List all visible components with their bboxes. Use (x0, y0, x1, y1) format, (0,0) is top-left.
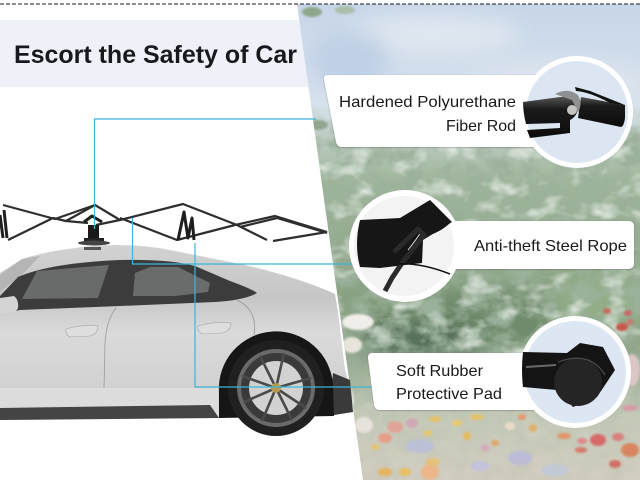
front window glass (22, 265, 109, 299)
door handles (66, 325, 98, 337)
callout: Hardened Polyurethane Fiber Rod: Hardened Polyurethane (339, 94, 516, 111)
icon: steel rope detail circle (349, 190, 461, 302)
door seams (104, 308, 116, 405)
lower highlight (0, 388, 218, 406)
rear bumper (328, 373, 353, 416)
garden photo background (290, 0, 640, 480)
folded joints (0, 210, 194, 240)
side sill (0, 405, 219, 420)
icon: rod hinge detail circle (521, 56, 633, 168)
title band (0, 20, 312, 87)
car body (0, 245, 352, 420)
icon: rubber pad detail circle (519, 316, 631, 428)
car (0, 245, 353, 436)
leader lines (94, 119, 372, 387)
wheel (228, 340, 324, 436)
rear window glass (133, 267, 210, 296)
callout: Soft Rubber Protective Pad: Soft Rubber (396, 363, 484, 380)
callout: Hardened Polyurethane Fiber Rod: Fiber Rod (446, 118, 516, 135)
title: Escort the Safety of Car (14, 41, 297, 69)
wheel arch (219, 331, 334, 418)
windshield (0, 256, 40, 292)
roof rack (0, 204, 327, 250)
side windows frame (0, 260, 257, 314)
roof mount (78, 225, 110, 250)
callout: Soft Rubber Protective Pad: Protective Pad (396, 386, 502, 403)
callout: Anti-theft Steel Rope: Anti-theft Steel Rope (474, 238, 627, 255)
dashed top border (0, 3, 640, 5)
mirror (0, 296, 18, 314)
callout: Hardened Polyurethane Fiber Rod (324, 75, 545, 147)
callout: Anti-theft Steel Rope (445, 221, 634, 269)
callout: Soft Rubber Protective Pad (368, 353, 535, 410)
